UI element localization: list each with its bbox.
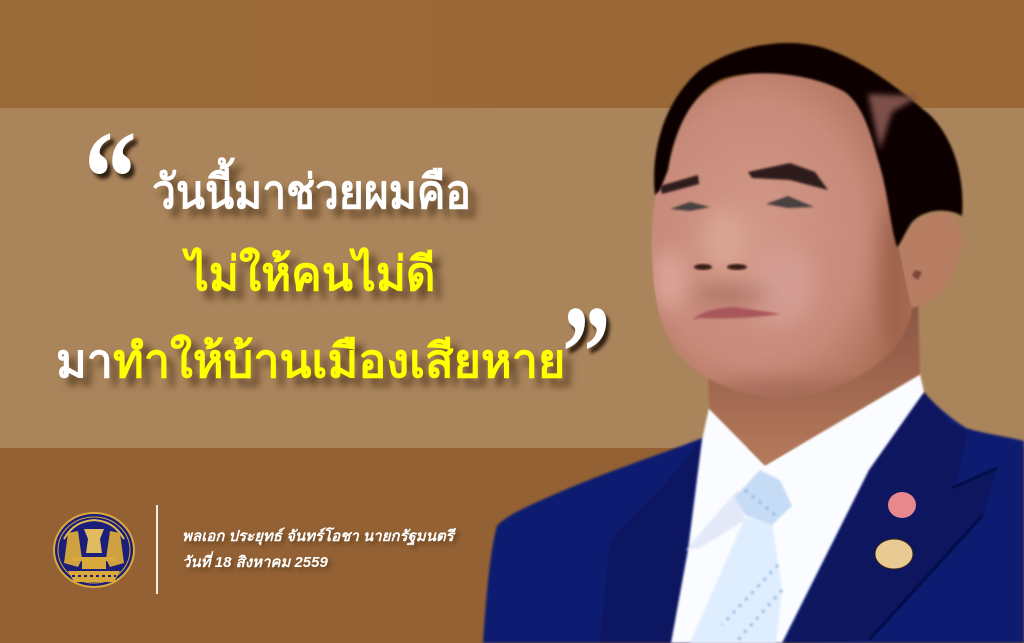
facial shading	[654, 200, 909, 402]
bottom band	[0, 448, 1024, 643]
attribution	[182, 527, 460, 572]
attribution: พลเอก ประยุทธ์ จันทร์โอชา นายกรัฐมนตรี	[182, 528, 454, 545]
hair	[654, 43, 963, 247]
nose	[694, 264, 747, 270]
tie	[690, 470, 792, 643]
lapel pin: gold	[875, 539, 913, 569]
attribution: วันที่ 18 สิงหาคม 2559	[182, 554, 328, 571]
lapel pin: pink	[888, 492, 916, 518]
top band	[0, 0, 1024, 108]
ear inner	[912, 270, 922, 280]
closing quotation mark: ”	[562, 279, 611, 428]
eyes and brows	[660, 163, 828, 211]
opening quotation mark: “	[84, 104, 137, 253]
government seal	[53, 512, 135, 588]
shirt	[671, 374, 924, 643]
middle band	[0, 108, 1024, 448]
quote line 3: มาทำให้บ้านเมืองเสียหาย	[56, 334, 565, 387]
quote line 1: วันนี้มาช่วยผมคือ	[152, 165, 471, 218]
portrait of the prime minister	[482, 42, 1024, 643]
face	[652, 70, 912, 396]
ear	[900, 213, 962, 308]
neck	[708, 300, 920, 465]
hair highlight	[868, 94, 920, 150]
quote line 2: ไม่ให้คนไม่ดี	[186, 247, 436, 300]
suit jacket	[483, 392, 1024, 643]
mouth	[692, 307, 781, 320]
vertical divider	[156, 505, 158, 594]
